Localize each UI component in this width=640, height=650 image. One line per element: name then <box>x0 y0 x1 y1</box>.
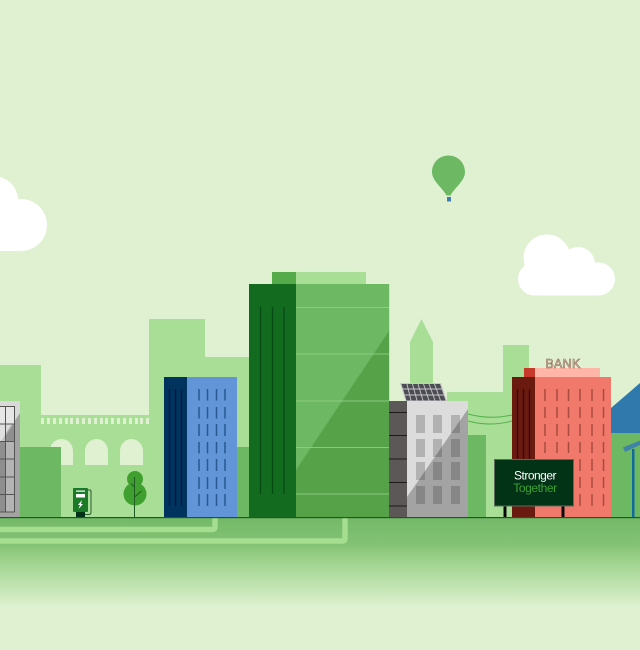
spire silhouette <box>410 319 433 517</box>
billboard: Stronger <box>514 468 557 482</box>
gray apartment building <box>389 401 468 517</box>
billboard <box>494 460 574 518</box>
aqueduct arches <box>50 439 143 465</box>
background silhouettes right <box>447 345 529 517</box>
cloud right <box>518 234 615 296</box>
background silhouettes left <box>0 319 249 517</box>
mid green block beside blue building <box>237 447 249 517</box>
gray glass building left <box>0 401 20 517</box>
illustration: green city skyline <box>0 156 640 602</box>
road paths <box>0 518 345 541</box>
aqueduct crenellation <box>41 418 149 424</box>
electric charging station <box>73 488 91 518</box>
right mid green block <box>611 433 640 517</box>
mid green block left <box>20 447 61 517</box>
solar panels <box>400 383 447 401</box>
bank sign text: BANK <box>545 357 581 371</box>
blue office building <box>164 377 237 517</box>
tree <box>124 471 146 518</box>
blue roof <box>611 383 640 433</box>
hot air balloon <box>432 156 465 202</box>
billboard: Together <box>513 481 557 495</box>
power lines <box>468 414 512 424</box>
bank building <box>512 357 611 517</box>
street lamp <box>623 440 640 517</box>
cloud left <box>0 177 47 251</box>
tall green tower <box>249 272 390 517</box>
ground line <box>0 517 640 518</box>
ground <box>0 518 640 608</box>
